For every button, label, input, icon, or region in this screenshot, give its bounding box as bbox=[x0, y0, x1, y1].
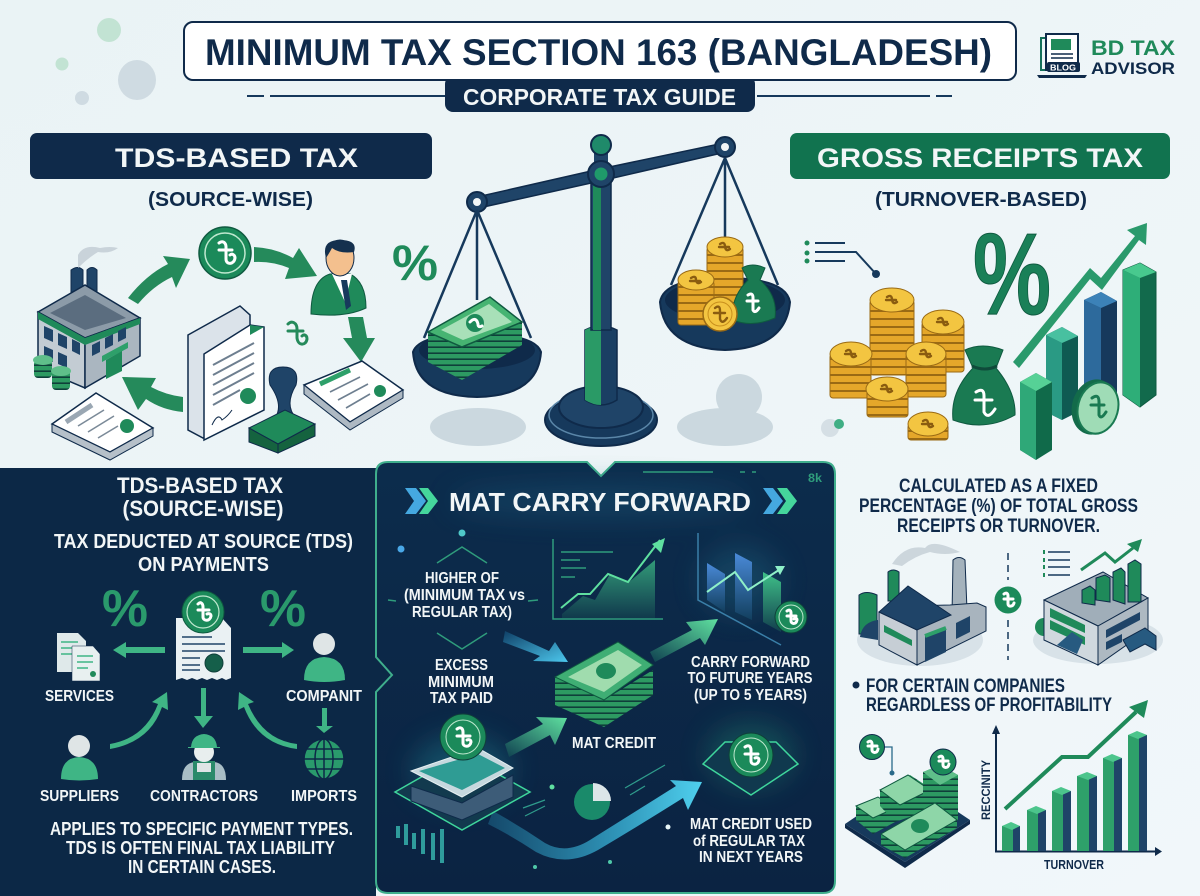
text: calculation description: CALCULATED AS A FIXED bbox=[899, 476, 1098, 497]
y axis label: RECCINITY bbox=[979, 760, 993, 820]
text: excess minimum tax paid: MINIMUM bbox=[428, 674, 494, 691]
text: higher of: (MINIMUM TAX vs bbox=[404, 587, 525, 604]
title: MINIMUM TAX SECTION 163 (BANGLADESH) bbox=[205, 32, 992, 73]
pivots bbox=[467, 135, 735, 212]
definition text bbox=[54, 531, 353, 576]
trend arrow bbox=[1013, 223, 1147, 368]
right pan with coins bbox=[660, 158, 790, 350]
decision frame bbox=[388, 547, 538, 649]
sub-heading: source-wise: (SOURCE-WISE) bbox=[148, 189, 313, 211]
panel heading: TDS-BASED TAX bbox=[117, 473, 283, 498]
small bars bbox=[398, 824, 442, 863]
definition text: ON PAYMENTS bbox=[138, 554, 269, 576]
arrow: from suppliers bbox=[110, 692, 168, 749]
panel sub-heading: (SOURCE-WISE) bbox=[122, 496, 284, 521]
panel: MAT carry forward bbox=[376, 462, 835, 893]
coin stacks bbox=[830, 288, 964, 440]
icon: services documents bbox=[57, 633, 100, 681]
coin stack short bbox=[678, 270, 714, 325]
bars bbox=[1002, 731, 1147, 851]
arrow: factory to coin bbox=[128, 256, 190, 304]
icon: stamp bbox=[249, 367, 315, 453]
curved arrow bbox=[488, 780, 702, 860]
icon: globe bbox=[304, 739, 344, 779]
text: higher of: REGULAR TAX) bbox=[412, 604, 512, 621]
note text bbox=[50, 819, 353, 877]
floor shadows bbox=[430, 374, 773, 446]
bullet text: certain companies: REGARDLESS OF PROFITABILITY bbox=[866, 695, 1112, 716]
arrow: from imports bbox=[238, 692, 297, 749]
top accent marks bbox=[643, 471, 756, 473]
text: higher of: HIGHER OF bbox=[425, 570, 499, 587]
icon: coin piles bbox=[33, 355, 71, 390]
text: MAT credit used bbox=[690, 816, 812, 866]
icon: blog document laptop: BLOG bbox=[1050, 64, 1076, 72]
list marks bbox=[1048, 552, 1070, 575]
illustration: TDS flow bbox=[33, 227, 403, 460]
list icon with connector bbox=[804, 240, 880, 278]
panel: TDS-based tax detail bbox=[0, 468, 394, 896]
label: contractors: CONTRACTORS bbox=[150, 788, 258, 805]
text: higher of bbox=[404, 570, 525, 621]
label: company: COMPANIT bbox=[286, 688, 362, 705]
icon: contractor worker bbox=[182, 734, 226, 780]
text: calculation description: PERCENTAGE (%) OF TOTAL GROSS bbox=[859, 496, 1138, 517]
icon: supplier person bbox=[61, 735, 98, 780]
definition text: TAX DEDUCTED AT SOURCE (TDS) bbox=[54, 531, 353, 553]
label: 8k: 8k bbox=[808, 471, 822, 485]
bar chart: turnover bbox=[979, 700, 1162, 872]
icon: receipt bbox=[176, 618, 231, 680]
sub-heading: turnover-based: (TURNOVER-BASED) bbox=[875, 189, 1087, 211]
text: carry forward bbox=[688, 654, 813, 704]
note text: TDS IS OFTEN FINAL TAX LIABILITY bbox=[66, 838, 335, 858]
icon: left paper bbox=[52, 393, 153, 460]
panel title: MAT CARRY FORWARD bbox=[449, 487, 751, 517]
background glows bbox=[412, 485, 795, 804]
header rule lines bbox=[247, 95, 952, 97]
subtitle badge: CORPORATE TAX GUIDE bbox=[463, 84, 736, 110]
trend arrow bbox=[1005, 712, 1136, 809]
icon: office building with chart bbox=[1033, 539, 1163, 665]
text: MAT credit used: of REGULAR TAX bbox=[693, 833, 805, 850]
left pan with cash bbox=[413, 210, 541, 397]
icon: percent sign near scale: % bbox=[392, 235, 438, 291]
illustration: balance scale bbox=[413, 135, 790, 446]
icon: cash stack bbox=[555, 642, 653, 727]
pillar bbox=[585, 180, 617, 405]
arrow: person down bbox=[343, 317, 375, 362]
panel heading: gross receipts tax: GROSS RECEIPTS TAX bbox=[817, 143, 1143, 173]
illustration: gross receipts bbox=[804, 209, 1156, 460]
label: suppliers: SUPPLIERS bbox=[40, 788, 119, 805]
icon: person bbox=[311, 240, 366, 315]
text: excess minimum tax paid: EXCESS bbox=[435, 657, 488, 674]
3D bars bbox=[1020, 263, 1156, 460]
base bbox=[545, 386, 657, 446]
label: services: SERVICES bbox=[45, 688, 114, 705]
glow dots bbox=[398, 530, 670, 869]
percent icon: % bbox=[973, 209, 1051, 339]
text: calculation description: RECEIPTS OR TURNOVER. bbox=[897, 516, 1100, 537]
logo bbox=[1037, 34, 1175, 78]
panel heading: gross receipts tax bbox=[790, 133, 1170, 179]
arrow: to future years bbox=[650, 619, 718, 662]
decorative circles bbox=[56, 18, 156, 105]
text: excess minimum tax paid bbox=[428, 657, 494, 707]
illustration: cash stacks bbox=[845, 734, 970, 868]
small dots bbox=[821, 419, 844, 437]
icon: factory bbox=[33, 247, 140, 390]
icon: factory with chimneys bbox=[857, 544, 986, 666]
icon: taka coin bbox=[994, 586, 1022, 614]
icon: tall document bbox=[188, 306, 264, 440]
text: carry forward: (UP TO 5 YEARS) bbox=[694, 687, 807, 704]
arrow: to services bbox=[113, 642, 165, 658]
panel heading: TDS-based tax: TDS-BASED TAX bbox=[115, 143, 358, 173]
coin stack tall bbox=[707, 237, 743, 305]
chevrons right bbox=[763, 488, 797, 514]
arrow: to cash stack bbox=[505, 717, 567, 757]
bullet text: certain companies: FOR CERTAIN COMPANIES bbox=[866, 676, 1065, 697]
panel heading: TDS-based tax bbox=[30, 133, 432, 179]
label: imports: IMPORTS bbox=[291, 788, 357, 805]
beam bbox=[477, 143, 726, 208]
bullet text: certain companies bbox=[852, 676, 1112, 716]
text: MAT credit used: MAT CREDIT USED bbox=[690, 816, 812, 833]
axes bbox=[996, 731, 1158, 852]
trend arrow bbox=[1081, 548, 1133, 570]
large coin bbox=[703, 297, 737, 331]
arrow: documents to factory bbox=[122, 377, 183, 412]
area chart bbox=[553, 538, 665, 619]
text: calculation description bbox=[859, 476, 1138, 537]
logo: ADVISOR bbox=[1091, 59, 1175, 78]
title bbox=[184, 22, 1016, 80]
icon: taka coin bbox=[182, 591, 224, 633]
note text: APPLIES TO SPECIFIC PAYMENT TYPES. bbox=[50, 819, 353, 839]
arrow: to MAT credit bbox=[503, 631, 568, 662]
text: MAT credit used: IN NEXT YEARS bbox=[699, 849, 803, 866]
arrow: to contractors bbox=[194, 688, 213, 728]
text: carry forward: CARRY FORWARD bbox=[691, 654, 810, 671]
chevrons left bbox=[405, 488, 438, 514]
icon: company person bbox=[304, 633, 345, 682]
subtitle badge bbox=[445, 76, 755, 112]
icon: pie chart bbox=[574, 783, 611, 820]
coin with connector bbox=[884, 747, 892, 772]
money bag bbox=[733, 265, 775, 324]
label: MAT credit: MAT CREDIT bbox=[572, 735, 656, 752]
text: carry forward: TO FUTURE YEARS bbox=[688, 670, 813, 687]
icon: diamond coin bbox=[703, 733, 798, 795]
icon: right paper stack bbox=[304, 361, 403, 430]
arrow: company to imports bbox=[316, 708, 333, 733]
text: excess minimum tax paid: TAX PAID bbox=[430, 690, 493, 707]
icon: taka symbol bbox=[288, 322, 307, 344]
note text: IN CERTAIN CASES. bbox=[128, 857, 276, 877]
icon: taka coin bbox=[199, 227, 251, 279]
arrow: to company bbox=[243, 642, 294, 658]
icon: percent left: % bbox=[102, 580, 148, 638]
dashed divider bbox=[1007, 553, 1009, 660]
icon: percent right: % bbox=[260, 580, 306, 638]
money bag bbox=[953, 346, 1015, 425]
arrow: coin to person bbox=[254, 247, 317, 279]
icon: platform with coin bbox=[395, 714, 530, 830]
x axis label: TURNOVER bbox=[1044, 857, 1104, 872]
logo: BD TAX bbox=[1091, 37, 1175, 60]
3D chart with coin bbox=[698, 533, 807, 645]
